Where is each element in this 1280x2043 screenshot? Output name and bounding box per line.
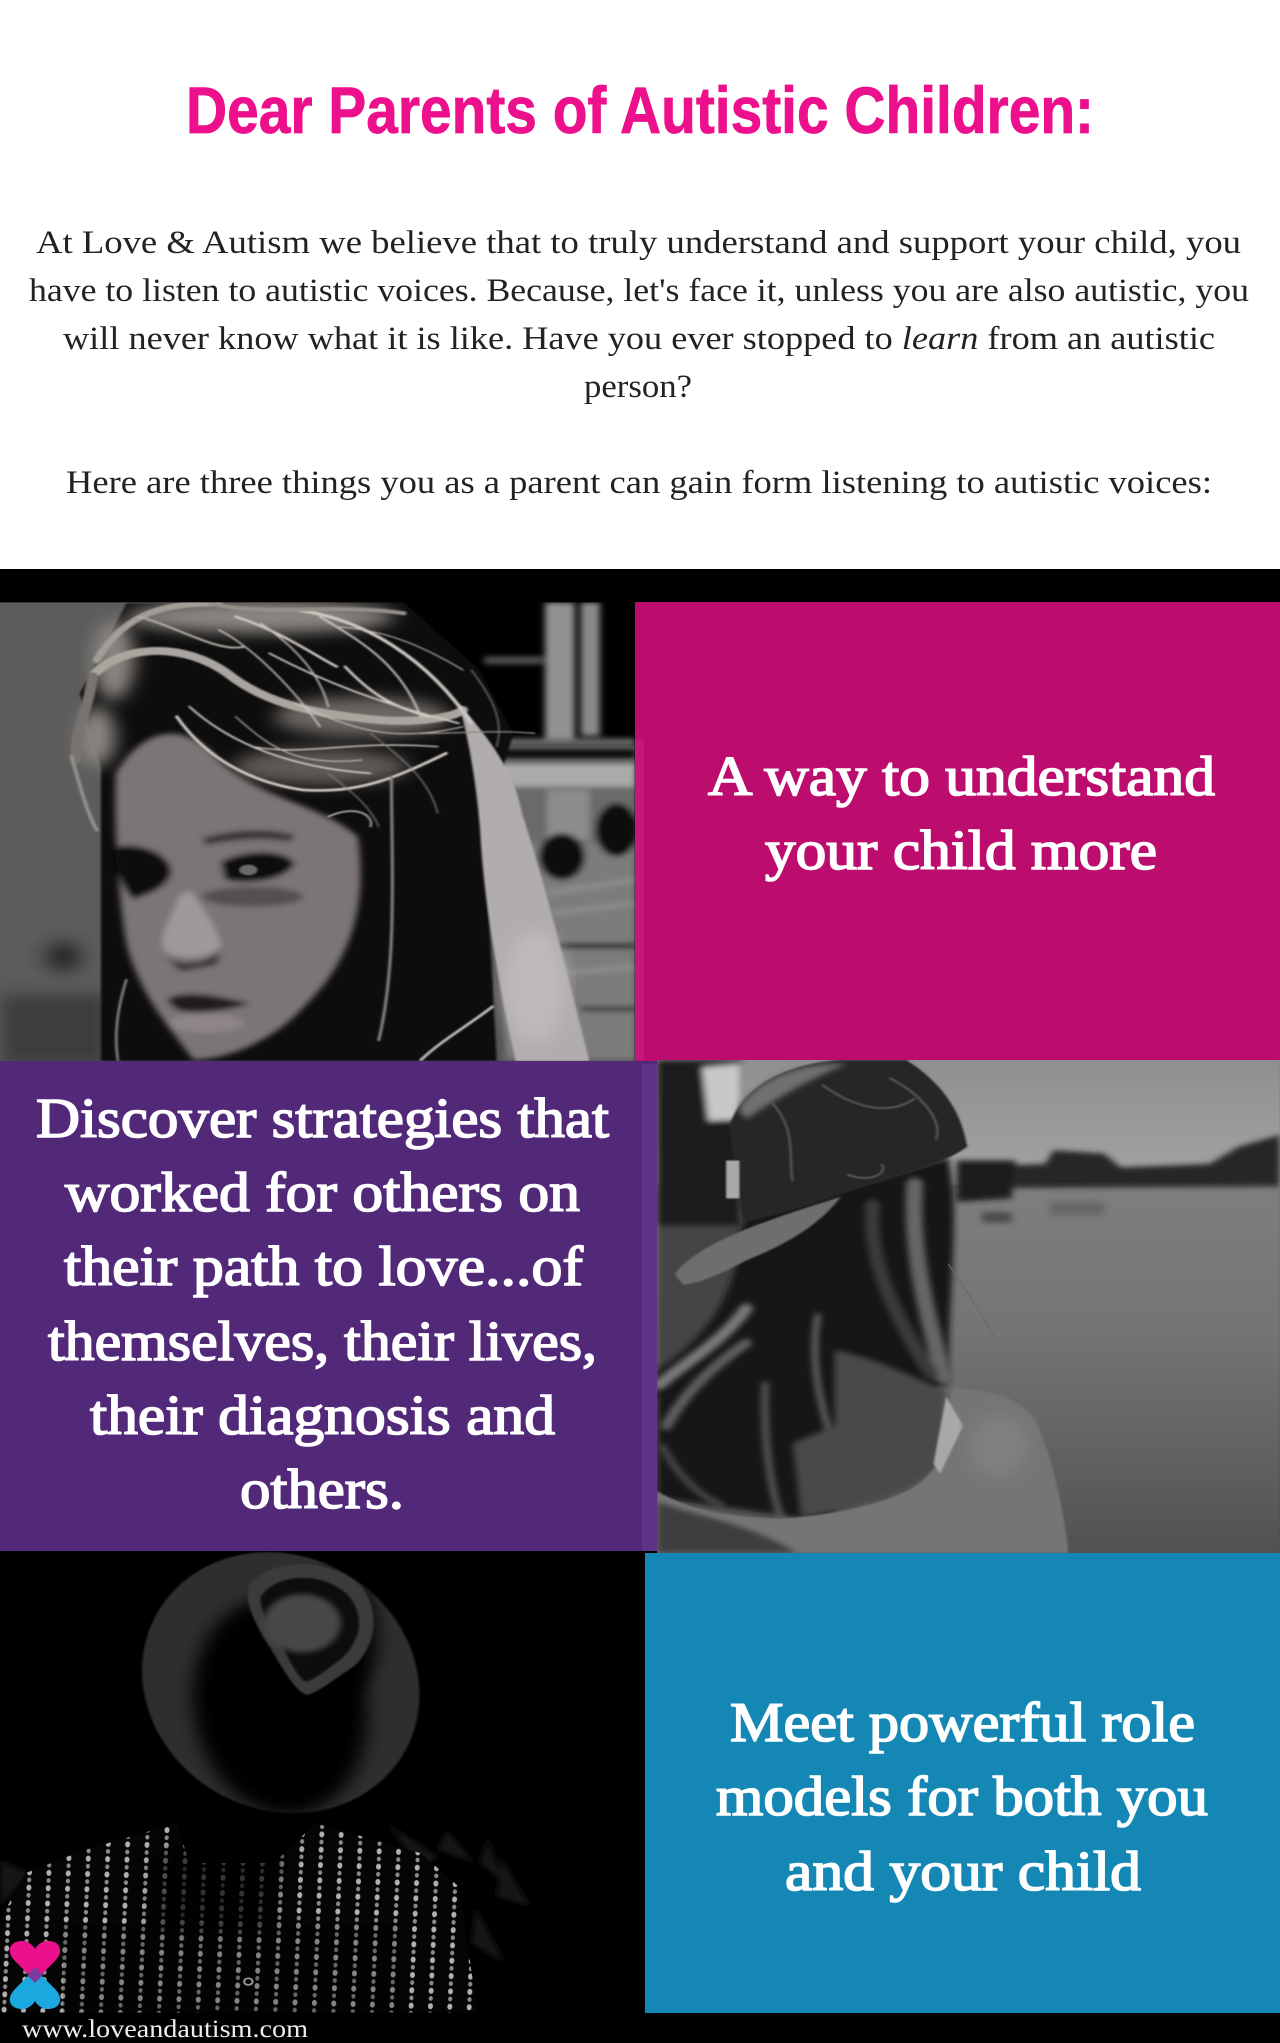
panel: blue statement	[645, 1553, 1280, 2013]
hat brim	[141, 1552, 420, 1814]
hair strands	[72, 603, 535, 1060]
website url: www.loveandautism.com	[22, 2016, 309, 2043]
panel: pink statement: A way to understand	[708, 746, 1215, 808]
intro text block: will never know what it is like. Have you ever stopped to learn from an autistic	[63, 321, 1215, 357]
bare back	[793, 1350, 946, 1517]
intro text block	[29, 225, 1249, 501]
panel: pink statement	[635, 602, 1280, 1061]
intro text block: have to listen to autistic voices. Because, let's face it, unless you are also autistic, you	[29, 273, 1249, 309]
icon: love and autism heart logo	[10, 1941, 60, 2009]
intro text block: person?	[584, 369, 692, 405]
panel: purple statement: their diagnosis and	[90, 1385, 555, 1447]
intro text block: At Love & Autism we believe that to truly understand and support your child, you	[36, 225, 1241, 261]
panel: purple statement: their path to love...of	[64, 1236, 583, 1298]
panel: blue statement: and your child	[785, 1841, 1141, 1903]
title: Dear Parents of Autistic Children:	[186, 73, 1094, 147]
veil	[459, 703, 589, 1061]
foliage	[0, 1823, 530, 1963]
hat crown	[248, 1564, 374, 1695]
sweater	[657, 1388, 1068, 1553]
cap	[729, 1060, 967, 1221]
hair mass	[80, 602, 513, 1061]
panel: blue statement: Meet powerful role	[730, 1692, 1195, 1754]
panel: purple statement: Discover strategies that	[36, 1088, 609, 1150]
hair	[657, 1157, 954, 1522]
panel: blue statement: models for both you	[716, 1766, 1208, 1828]
panel: purple statement	[0, 1061, 657, 1551]
panel: purple statement: themselves, their lives,	[48, 1311, 597, 1373]
panel: purple statement: worked for others on	[65, 1162, 580, 1224]
hair mid tones	[78, 600, 450, 785]
photo: man in hat	[0, 1529, 530, 2017]
face	[115, 734, 361, 1060]
panel: pink statement: your child more	[765, 820, 1157, 882]
photo: girl in cap looking at river	[657, 1060, 1280, 1557]
intro text block: Here are three things you as a parent can gain form listening to autistic voices:	[66, 465, 1212, 501]
black panel band	[0, 569, 1280, 2043]
photo: girl with windswept hair	[0, 593, 638, 1073]
panel: purple statement: others.	[240, 1459, 404, 1521]
shirt	[0, 1817, 480, 2017]
